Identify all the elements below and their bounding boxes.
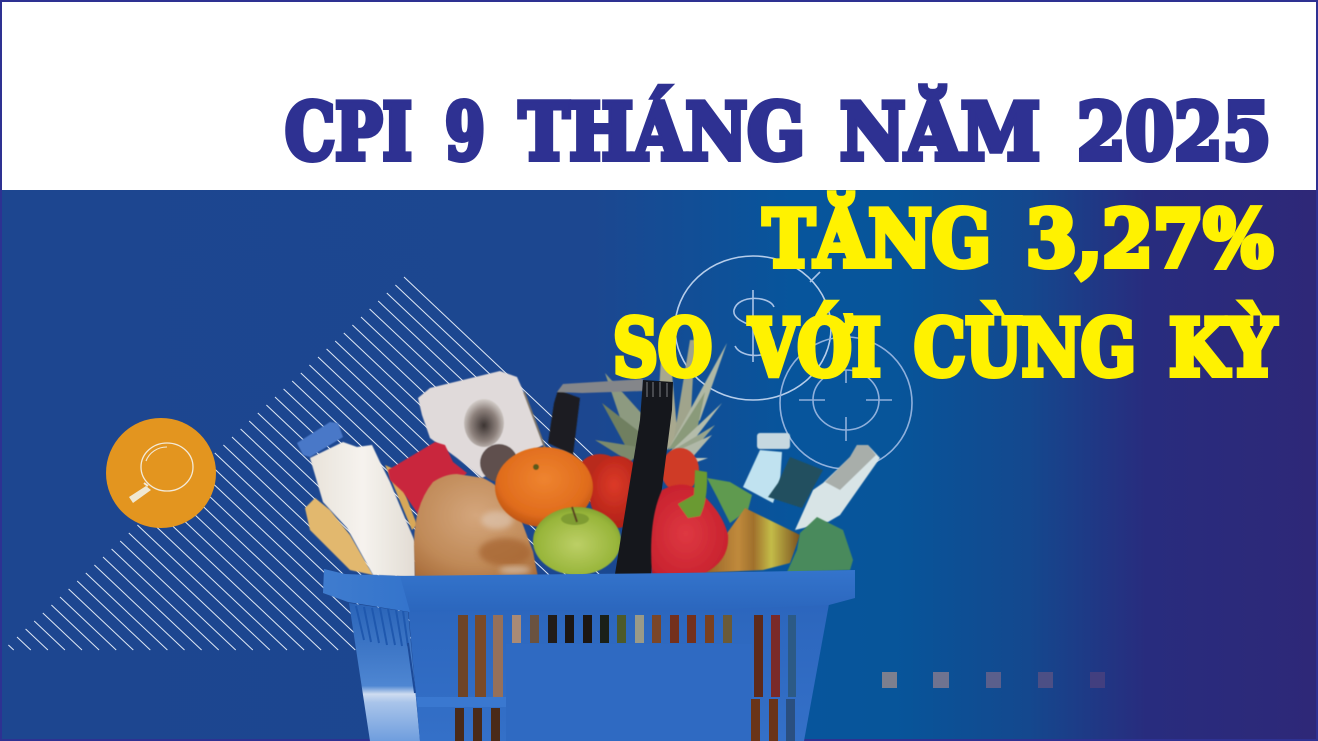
lower band xyxy=(416,697,506,707)
headline: increase: 3,27% xyxy=(1026,194,1273,285)
milk bottle xyxy=(297,422,415,577)
apple xyxy=(533,507,621,575)
title: 9 xyxy=(445,87,485,178)
icon: magnifier badge xyxy=(106,418,216,528)
orange xyxy=(495,447,593,527)
headline: increase: TĂNG xyxy=(763,192,991,285)
illustration: grocery basket xyxy=(297,340,880,741)
bell pepper xyxy=(651,470,728,574)
handle strap xyxy=(615,380,673,574)
basket rim left corner xyxy=(323,569,410,612)
icon: target circle outline xyxy=(780,337,912,469)
basket rim xyxy=(395,570,855,612)
headline: compared to same period: CÙNG xyxy=(914,302,1136,394)
pineapple leaves xyxy=(595,340,727,468)
white bottle xyxy=(795,445,880,530)
bread loaf xyxy=(414,474,538,577)
title xyxy=(285,85,1271,178)
egg carton xyxy=(418,371,545,482)
croissant xyxy=(305,465,417,575)
basket side panel xyxy=(349,603,420,741)
title: THÁNG xyxy=(519,86,805,178)
lower slots xyxy=(455,699,795,741)
red bottle xyxy=(388,442,467,517)
lettuce top xyxy=(707,478,752,523)
headline: increase xyxy=(763,192,1273,285)
top slots xyxy=(458,615,796,697)
diagonal hatch triangle xyxy=(8,277,600,650)
handle left strut xyxy=(548,379,643,455)
header band xyxy=(2,2,1316,190)
title: CPI xyxy=(285,87,412,178)
title: NĂM xyxy=(840,85,1040,178)
headline: compared to same period: SO xyxy=(613,303,712,394)
front panel xyxy=(506,644,752,741)
decorative square dots xyxy=(882,672,1105,688)
basket front xyxy=(408,604,829,741)
headline: compared to same period: VỚI xyxy=(748,301,881,394)
tomatoes xyxy=(578,448,699,528)
headline: compared to same period xyxy=(613,301,1277,394)
title: 2025 xyxy=(1077,87,1271,178)
basket side ribs xyxy=(356,606,408,646)
icon: dollar circle outline xyxy=(675,256,831,400)
corner shadow xyxy=(408,643,415,693)
water bottle xyxy=(743,433,790,503)
headline: compared to same period: KỲ xyxy=(1169,301,1277,394)
dark bottle neck xyxy=(768,457,823,508)
lettuce bottom xyxy=(787,517,853,572)
oil bottle xyxy=(697,508,800,573)
